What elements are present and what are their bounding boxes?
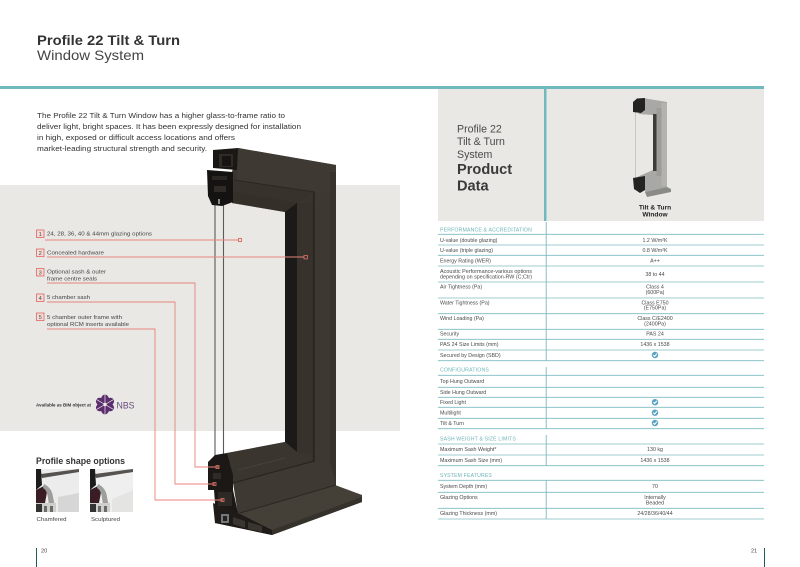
data table: configurations: Top Hung Outward (440, 379, 484, 385)
profile label: sculptured: Sculptured (91, 517, 120, 523)
profile image: chamfered (36, 469, 79, 512)
intro text block: in high, exposed or difficult access locations and offers (37, 133, 235, 142)
data table: performance and accreditation: U-value (double glazing) (440, 238, 498, 244)
data table: performance and accreditation: Acoustic Performance-various options (440, 269, 532, 275)
data table: sash weight and size limits (438, 435, 764, 466)
data table: performance and accreditation: Security (440, 332, 459, 338)
profile label: chamfered: Chamfered (36, 517, 66, 523)
data table: performance and accreditation: depending on specification-RW (C;Ctr) (440, 274, 532, 280)
data table: system features: 70 (652, 484, 658, 490)
icon: window thumbnail (633, 98, 671, 197)
panel: product data heading: Product (457, 162, 512, 178)
top rail upper band (237, 148, 336, 196)
intro text block: The Profile 22 Tilt & Turn Window has a higher glass-to-frame ratio to (37, 111, 285, 120)
frame body (227, 148, 336, 514)
callout 4: 5 chamber sash: 4 (39, 296, 42, 302)
data table: system features: Glazing Thickness (mm) (440, 511, 497, 517)
icon: tick (652, 399, 658, 405)
data table: sash weight and size limits: 130 kg (647, 447, 663, 453)
right jamb (315, 192, 330, 462)
panel: grey background band (0, 185, 400, 431)
callout 5: outer frame: optional RCM inserts available (47, 322, 129, 328)
page number 21: 21 (751, 548, 757, 554)
data table: performance and accreditation: PAS 24 Size Limits (mm) (440, 342, 499, 348)
panel: product image: Tilt & Turn (639, 204, 671, 212)
data table: configurations: Fixed Light (440, 400, 466, 406)
data table: performance and accreditation: (600Pa) (646, 290, 665, 296)
glass panes (215, 200, 224, 462)
data table: configurations: Side Hung Outward (440, 390, 486, 396)
intro text block: deliver light, bright spaces. It has been expressly designed for installation (37, 122, 301, 131)
data table: system features: Glazing Options (440, 495, 478, 501)
data table: system features: Internally (644, 495, 666, 501)
title: Window System (37, 47, 144, 63)
data table: sash weight and size limits: 1436 x 1538 (640, 458, 670, 464)
data table: performance and accreditation: Water Tightness (Pa) (440, 300, 490, 306)
data table: performance and accreditation: Secured by Design (SBD) (440, 353, 501, 359)
callout 3: centre seals: frame centre seals (47, 276, 97, 282)
callout 3: centre seals: Optional sash & outer (47, 270, 106, 276)
icon: NBS logo (94, 394, 134, 414)
page number 20 (36, 548, 47, 567)
data table: performance and accreditation: 1436 x 1538 (640, 342, 670, 348)
data table: performance and accreditation (438, 222, 764, 361)
data table: performance and accreditation: (E750Pa) (644, 306, 666, 312)
bottom end section (208, 453, 233, 490)
callout 1: glazing options: 1 (39, 232, 42, 238)
callout 1: glazing options (36, 230, 242, 242)
callout 1: glazing options: 24, 28, 36, 40 & 44mm glazing options (47, 232, 152, 238)
data table: performance and accreditation: 0.8 W/m²K (642, 248, 668, 254)
icon: tick (652, 420, 658, 426)
heading: profile shape options: Profile shape options (36, 456, 125, 466)
data table: performance and accreditation: PERFORMANCE & ACCREDITATION (440, 228, 532, 234)
callout 5: outer frame: 5 chamber outer frame with (47, 315, 122, 321)
data table: performance and accreditation: U-value (triple glazing) (440, 248, 493, 254)
data table: performance and accreditation: Class 4 (646, 285, 664, 291)
data table: performance and accreditation: Energy Rating (WER) (440, 258, 491, 264)
callout 5: outer frame (36, 313, 224, 502)
panel: product image (547, 89, 764, 221)
data table: performance and accreditation: Class E750 (641, 300, 669, 306)
data table: system features: Beaded (646, 500, 664, 506)
window cross-section illustration (207, 148, 362, 535)
callout 5: outer frame: 5 (39, 315, 42, 321)
callout 4: 5 chamber sash: 5 chamber sash (47, 295, 90, 301)
profile image: sculptured (90, 469, 133, 512)
data table: configurations: CONFIGURATIONS (440, 368, 490, 374)
data table: system features (438, 473, 764, 519)
data table: configurations: Multilight (440, 410, 461, 416)
panel: product data heading: Profile 22 (457, 124, 502, 136)
callout 4: 5 chamber sash (36, 294, 216, 486)
panel: product data heading (438, 86, 547, 221)
panel: product data heading: Data (457, 178, 490, 194)
title: Profile 22 Tilt & Turn (37, 32, 180, 48)
sill top (215, 485, 362, 535)
data table: performance and accreditation: PAS 24 (646, 332, 664, 338)
page number 21 (751, 548, 765, 567)
panel: product image: Window (642, 212, 668, 218)
data table: performance and accreditation: A++ (650, 258, 660, 264)
bottom rails (227, 442, 314, 482)
data table: performance and accreditation: Wind Loading (Pa) (440, 316, 484, 322)
icon: NBS logo: NBS (116, 400, 134, 412)
data table: performance and accreditation: 38 to 44 (645, 272, 665, 278)
data table: configurations: Tilt & Turn (440, 421, 464, 427)
intro text block: market-leading structural strength and security. (37, 144, 207, 153)
data table: performance and accreditation: (2400Pa) (644, 322, 666, 328)
data table: sash weight and size limits: SASH WEIGHT & SIZE LIMITS (440, 436, 517, 442)
page number 20: 20 (41, 548, 47, 554)
BIM object label: Available as BIM object at (36, 402, 91, 408)
data table: configurations (438, 367, 764, 429)
data table: performance and accreditation: Air Tightness (Pa) (440, 285, 482, 291)
data table: performance and accreditation: 1.2 W/m²K (642, 238, 668, 244)
callout 3: centre seals: 3 (39, 270, 42, 276)
data table: system features: 24/28/36/40/44 (637, 511, 673, 517)
callout 3: centre seals (36, 268, 219, 468)
callout 2: concealed hardware: 2 (39, 251, 42, 257)
callout 2: concealed hardware (36, 249, 307, 259)
data table: system features: System Depth (mm) (440, 484, 487, 490)
panel: product data heading: System (457, 149, 492, 161)
icon: tick (652, 352, 658, 358)
data table: sash weight and size limits: Maximum Sash Weight* (440, 447, 496, 453)
title (37, 32, 180, 63)
top end section (213, 148, 238, 170)
panel: product data heading: Tilt & Turn (457, 136, 505, 148)
data table: system features: SYSTEM FEATURES (440, 473, 493, 479)
intro text block (37, 111, 301, 153)
callout 2: concealed hardware: Concealed hardware (47, 250, 104, 256)
icon: tick (652, 410, 658, 416)
data table: performance and accreditation: Class C/E2400 (637, 316, 673, 322)
data table: sash weight and size limits: Maximum Sash Size (mm) (440, 458, 502, 464)
teal header rule (0, 86, 764, 89)
